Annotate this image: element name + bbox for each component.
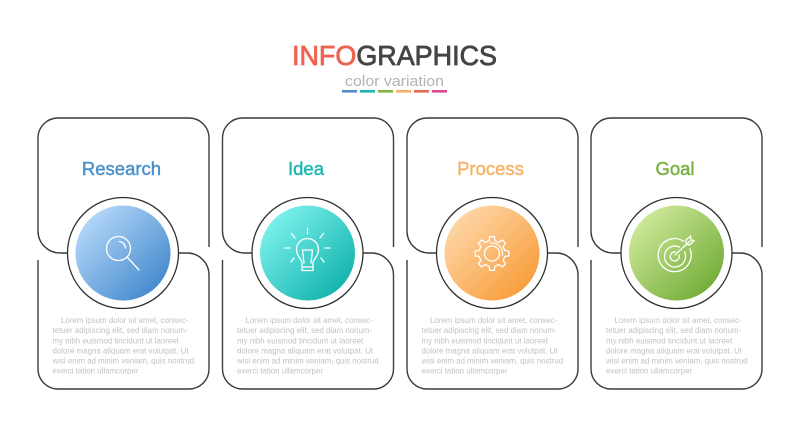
- body text: dolore magna aliquam erat volutpat. Ut: [422, 346, 558, 356]
- icon: gear: [475, 237, 509, 270]
- body text: Lorem ipsum dolor sit amet, consec-: [430, 316, 558, 325]
- circle badge: [436, 198, 548, 308]
- body text: dolore magna aliquam erat volutpat. Ut: [237, 346, 374, 356]
- panel: research: [38, 118, 209, 389]
- body text: wisi enim ad minim veniam, quis nostrud: [52, 356, 194, 366]
- body text: wisi enim ad minim veniam, quis nostrud: [605, 356, 748, 366]
- body text: tetuer adipiscing elit, sed diam nonum-: [52, 326, 188, 335]
- colour legend bars: [342, 90, 447, 93]
- body text: tetuer adipiscing elit, sed diam nonum-: [237, 326, 372, 335]
- circle badge: [252, 198, 363, 308]
- icon: light bulb: [285, 228, 330, 270]
- body text: dolore magna aliquam erat volutpat. Ut: [606, 346, 743, 356]
- body text: Lorem ipsum dolor sit amet, consec-: [61, 316, 189, 325]
- body text: exerci tation ullamcorper: [422, 366, 508, 376]
- circle badge: [68, 198, 178, 308]
- card outline: [38, 118, 209, 389]
- heading: Process: [457, 158, 524, 179]
- body text: wisi enim ad minim veniam, quis nostrud: [420, 356, 563, 366]
- circle badge: [621, 198, 732, 308]
- body text: exerci tation ullamcorper: [237, 366, 323, 376]
- body text: my nibh euismod tincidunt ut laoreet: [606, 336, 733, 346]
- heading: Idea: [288, 158, 325, 179]
- body text: tetuer adipiscing elit, sed diam nonum-: [422, 326, 557, 335]
- body text: my nibh euismod tincidunt ut laoreet: [422, 336, 549, 346]
- body text: exerci tation ullamcorper: [606, 366, 692, 376]
- panel: goal: [591, 118, 762, 389]
- subtitle: color variation: [345, 73, 444, 90]
- card outline: [591, 118, 762, 389]
- body text: my nibh euismod tincidunt ut laoreet: [52, 336, 180, 346]
- body text: exerci tation ullamcorper: [52, 366, 139, 376]
- body text: my nibh euismod tincidunt ut laoreet: [237, 336, 364, 346]
- panel: process: [407, 118, 578, 389]
- body text: Lorem ipsum dolor sit amet, consec-: [614, 316, 742, 325]
- icon: magnifying glass: [106, 236, 139, 270]
- icon: target: [658, 236, 694, 272]
- panel: idea: [222, 118, 394, 389]
- card outline: [407, 118, 578, 389]
- title: INFOGRAPHICS: [292, 40, 497, 71]
- card outline: [222, 118, 394, 389]
- body text: Lorem ipsum dolor sit amet, consec-: [246, 316, 373, 325]
- heading: Goal: [655, 158, 695, 179]
- body text: tetuer adipiscing elit, sed diam nonum-: [606, 326, 741, 335]
- heading: Research: [82, 158, 161, 179]
- body text: dolore magna aliquam erat volutpat. Ut: [52, 346, 189, 356]
- body text: wisi enim ad minim veniam, quis nostrud: [236, 356, 379, 366]
